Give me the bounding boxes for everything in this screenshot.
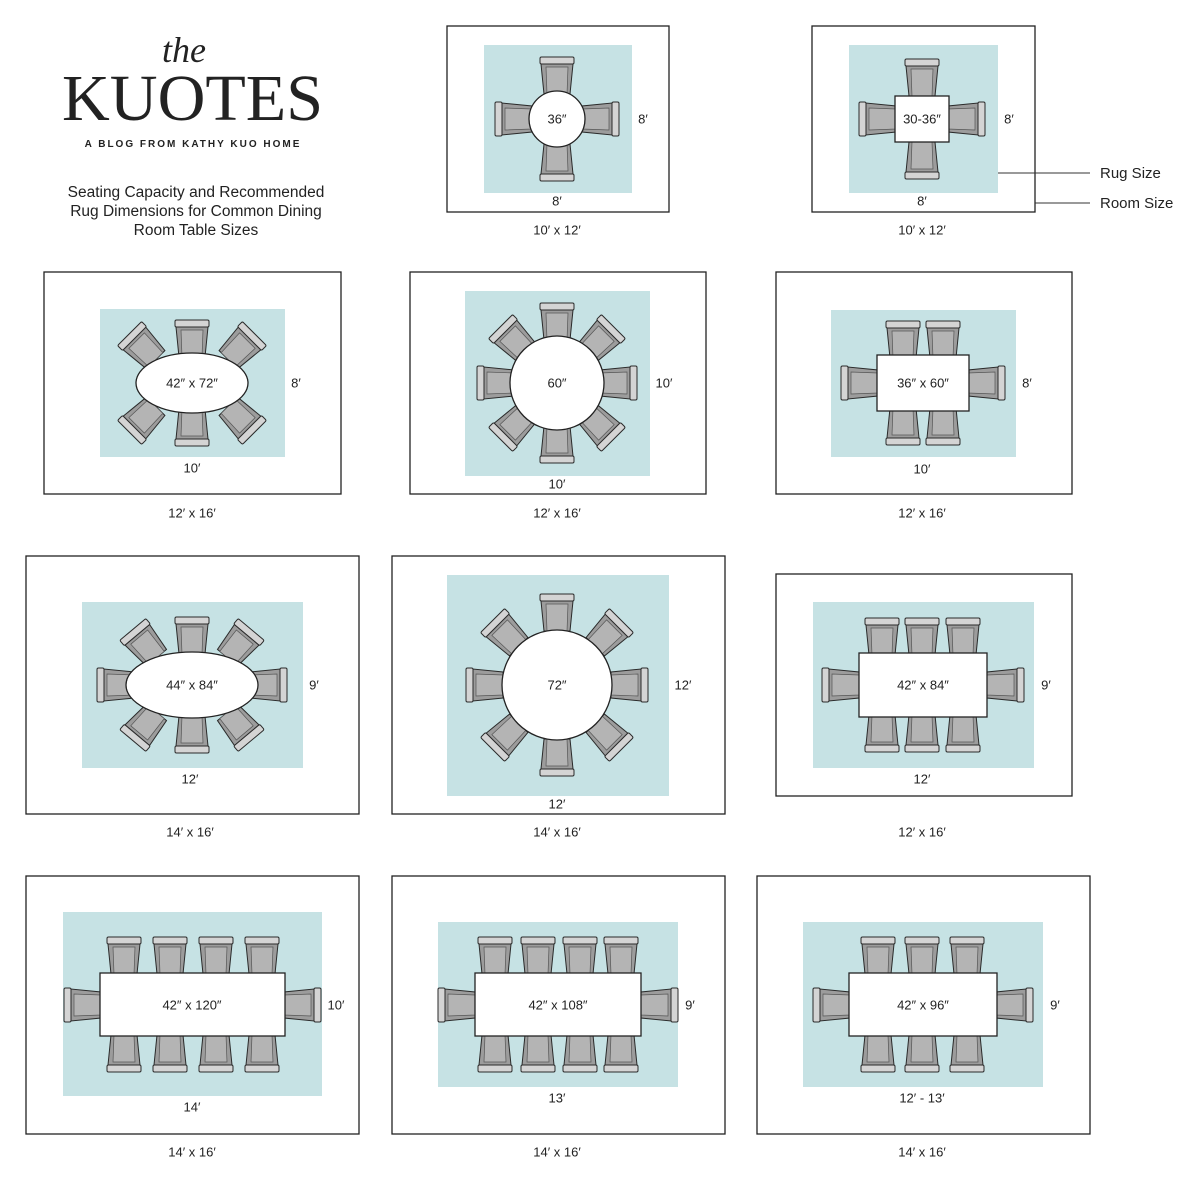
panel: 36 round: 8′ <box>552 193 562 208</box>
panel: 36x60 rect: 36″ x 60″ <box>897 375 949 390</box>
panel: 42x108 rect: 13′ <box>549 1090 566 1105</box>
panel: 42x84 rect: 9′ <box>1041 677 1051 692</box>
subtitle: Room Table Sizes <box>134 222 259 239</box>
panel: 42x108 rect <box>392 876 725 1159</box>
panel: 42x84 rect: 12′ <box>914 771 931 786</box>
panel: 42x96 rect: 14′ x 16′ <box>898 1144 946 1159</box>
panel: 44x84 oval: 44″ x 84″ <box>166 677 218 692</box>
panel: 42x120 rect: 10′ <box>328 997 345 1012</box>
panel: 72 round: 14′ x 16′ <box>533 824 581 839</box>
panel: 30-36 square: 8′ <box>917 193 927 208</box>
panel: 42x96 rect <box>757 876 1090 1159</box>
panel: 36 round <box>447 26 669 237</box>
panel: 44x84 oval <box>26 556 359 839</box>
legend: Room Size <box>1100 195 1173 212</box>
panel: 60 round: 60″ <box>547 375 567 390</box>
subtitle <box>68 184 324 239</box>
panel: 42x72 oval: 42″ x 72″ <box>166 375 218 390</box>
panel: 42x72 oval: 8′ <box>291 375 301 390</box>
legend <box>998 165 1173 212</box>
panel: 42x108 rect: 42″ x 108″ <box>528 997 588 1012</box>
panel: 60 round <box>410 272 706 520</box>
logo: KUOTES <box>62 62 323 135</box>
logo: A BLOG FROM KATHY KUO HOME <box>85 139 301 150</box>
panel: 72 round <box>392 556 725 839</box>
panel: 42x120 rect: 14′ <box>184 1099 201 1114</box>
panel: 30-36 square <box>812 26 1035 237</box>
panel: 42x72 oval: 10′ <box>184 460 201 475</box>
panel: 36x60 rect: 8′ <box>1022 375 1032 390</box>
panel: 60 round: 10′ <box>549 476 566 491</box>
panel: 60 round: 10′ <box>656 375 673 390</box>
panel: 42x108 rect: 14′ x 16′ <box>533 1144 581 1159</box>
panel: 36 round: 10′ x 12′ <box>533 222 581 237</box>
panel: 42x120 rect: 14′ x 16′ <box>168 1144 216 1159</box>
panel: 36x60 rect <box>776 272 1072 520</box>
panel: 60 round: 12′ x 16′ <box>533 505 581 520</box>
panel: 30-36 square: 8′ <box>1004 111 1014 126</box>
legend: Rug Size <box>1100 165 1161 182</box>
subtitle: Seating Capacity and Recommended <box>68 184 324 201</box>
panel: 42x84 rect: 42″ x 84″ <box>897 677 949 692</box>
panel: 30-36 square: 30-36″ <box>903 111 941 126</box>
logo: the <box>162 30 206 70</box>
panel: 42x96 rect: 9′ <box>1050 997 1060 1012</box>
panel: 44x84 oval: 14′ x 16′ <box>166 824 214 839</box>
panel: 42x96 rect: 42″ x 96″ <box>897 997 949 1012</box>
panel: 36x60 rect: 10′ <box>914 461 931 476</box>
panel: 72 round: 12′ <box>549 796 566 811</box>
panel: 42x72 oval: 12′ x 16′ <box>168 505 216 520</box>
panel: 42x120 rect: 42″ x 120″ <box>162 997 222 1012</box>
panel: 72 round: 12′ <box>675 677 692 692</box>
panel: 44x84 oval: 9′ <box>309 677 319 692</box>
panel: 42x96 rect: 12′ - 13′ <box>899 1090 945 1105</box>
panel: 44x84 oval: 12′ <box>182 771 199 786</box>
panel: 36 round: 36″ <box>547 111 567 126</box>
panel: 42x84 rect: 12′ x 16′ <box>898 824 946 839</box>
panel: 36x60 rect: 12′ x 16′ <box>898 505 946 520</box>
panel: 36 round: 8′ <box>638 111 648 126</box>
panel: 42x108 rect: 9′ <box>685 997 695 1012</box>
panel: 42x84 rect <box>776 574 1072 839</box>
panel: 42x72 oval <box>44 272 341 520</box>
logo <box>62 30 323 150</box>
panel: 30-36 square: 10′ x 12′ <box>898 222 946 237</box>
subtitle: Rug Dimensions for Common Dining <box>70 203 322 220</box>
panel: 72 round: 72″ <box>547 677 567 692</box>
panel: 42x120 rect <box>26 876 359 1159</box>
